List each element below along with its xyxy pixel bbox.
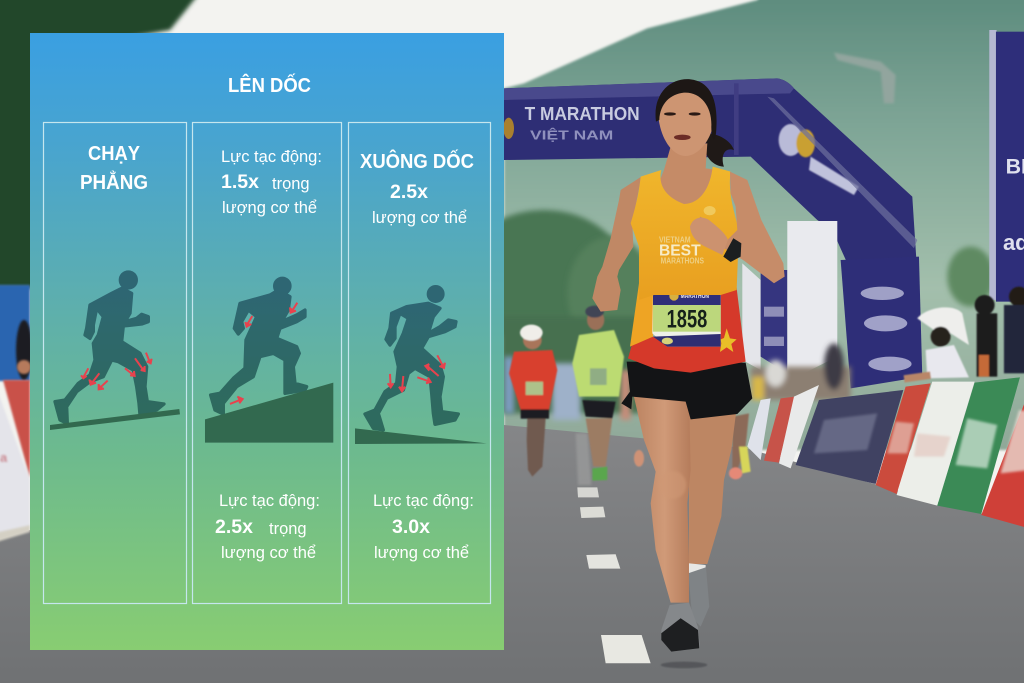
flags bbox=[742, 221, 922, 388]
uphill impact bottom: Lực tạc động: bbox=[219, 492, 320, 510]
column heading: CHẠY bbox=[88, 143, 141, 165]
right banner bbox=[989, 30, 1024, 302]
race bib: MARATHON bbox=[681, 293, 709, 300]
left barrier: a bbox=[0, 450, 8, 465]
uphill impact bottom: 2.5x bbox=[215, 516, 253, 538]
barriers bbox=[747, 370, 1024, 531]
crowd bbox=[504, 343, 851, 420]
uphill impact bottom: lượng cơ thể bbox=[221, 544, 316, 562]
far leg bbox=[689, 390, 739, 564]
street lamp bbox=[834, 53, 896, 103]
downhill impact bottom: Lực tạc động: bbox=[373, 492, 474, 510]
jersey text bbox=[659, 235, 704, 265]
infographic panel bbox=[30, 33, 504, 650]
downhill impact top bbox=[372, 181, 467, 227]
uphill impact top: trọng bbox=[272, 175, 310, 193]
column heading: PHẲNG bbox=[80, 171, 148, 194]
upper body bbox=[592, 79, 785, 312]
runner silhouette on descent bbox=[355, 285, 487, 444]
face bbox=[658, 90, 714, 156]
uphill impact top: lượng cơ thể bbox=[222, 199, 317, 217]
downhill impact top: 2.5x bbox=[390, 181, 428, 203]
shorts bbox=[621, 362, 752, 419]
arm: swing low bbox=[592, 177, 641, 312]
hand and fist bbox=[690, 218, 728, 255]
red hem bbox=[628, 280, 746, 373]
main runner bbox=[592, 79, 785, 668]
jersey bbox=[631, 167, 739, 300]
column: downhill bbox=[348, 122, 490, 604]
column heading: XUÔNG DỐC bbox=[360, 149, 474, 173]
ground shadow bbox=[661, 662, 707, 668]
uphill impact bottom: trọng bbox=[269, 520, 307, 538]
column: uphill bbox=[192, 122, 342, 604]
background flags, crowd and barriers bbox=[504, 221, 1024, 531]
left barrier bbox=[0, 370, 30, 544]
neck and chest bbox=[657, 143, 731, 207]
eyes and mouth bbox=[664, 112, 701, 140]
roadside spectators bbox=[904, 287, 1024, 382]
column heading bbox=[80, 143, 148, 194]
downhill impact top: lượng cơ thể bbox=[372, 209, 467, 227]
uphill impact top: Lực tạc động: bbox=[221, 148, 322, 166]
watch bbox=[723, 238, 741, 262]
road lane markings bbox=[576, 433, 651, 663]
downhill impact bottom: 3.0x bbox=[392, 516, 430, 538]
column: flat running bbox=[44, 122, 186, 604]
yellow side panel bbox=[630, 283, 654, 347]
force arrows bbox=[230, 303, 297, 404]
inflatable finish arch bbox=[503, 78, 919, 300]
ponytail bbox=[705, 133, 734, 167]
barrier logos bbox=[814, 410, 1024, 473]
lower body bbox=[621, 280, 752, 668]
jersey text: VIETNAM bbox=[659, 235, 691, 244]
runner silhouette on gentle slope bbox=[50, 270, 180, 430]
jersey text: BEST bbox=[659, 243, 701, 260]
background runners bbox=[509, 306, 751, 481]
panel heading: LÊN DỐC bbox=[228, 73, 311, 97]
race bib: 1858 bbox=[667, 306, 707, 334]
inflatable finish arch: VIỆT NAM bbox=[530, 127, 613, 142]
downhill impact bottom: lượng cơ thể bbox=[374, 544, 469, 562]
uphill impact top bbox=[221, 148, 322, 217]
star bbox=[720, 328, 737, 352]
jersey text: MARATHONS bbox=[661, 255, 704, 265]
arm: bent with fist bbox=[691, 172, 785, 283]
uphill impact bottom bbox=[215, 492, 320, 562]
near leg bbox=[632, 390, 691, 603]
downhill impact bottom bbox=[373, 492, 474, 562]
inflatable finish arch: T MARATHON bbox=[525, 103, 640, 124]
force arrows bbox=[388, 355, 445, 391]
race bib bbox=[652, 290, 721, 347]
hair bbox=[656, 79, 717, 139]
uphill impact top: 1.5x bbox=[221, 171, 259, 193]
runner silhouette on steep slope bbox=[205, 277, 333, 443]
force arrows bbox=[81, 353, 152, 389]
